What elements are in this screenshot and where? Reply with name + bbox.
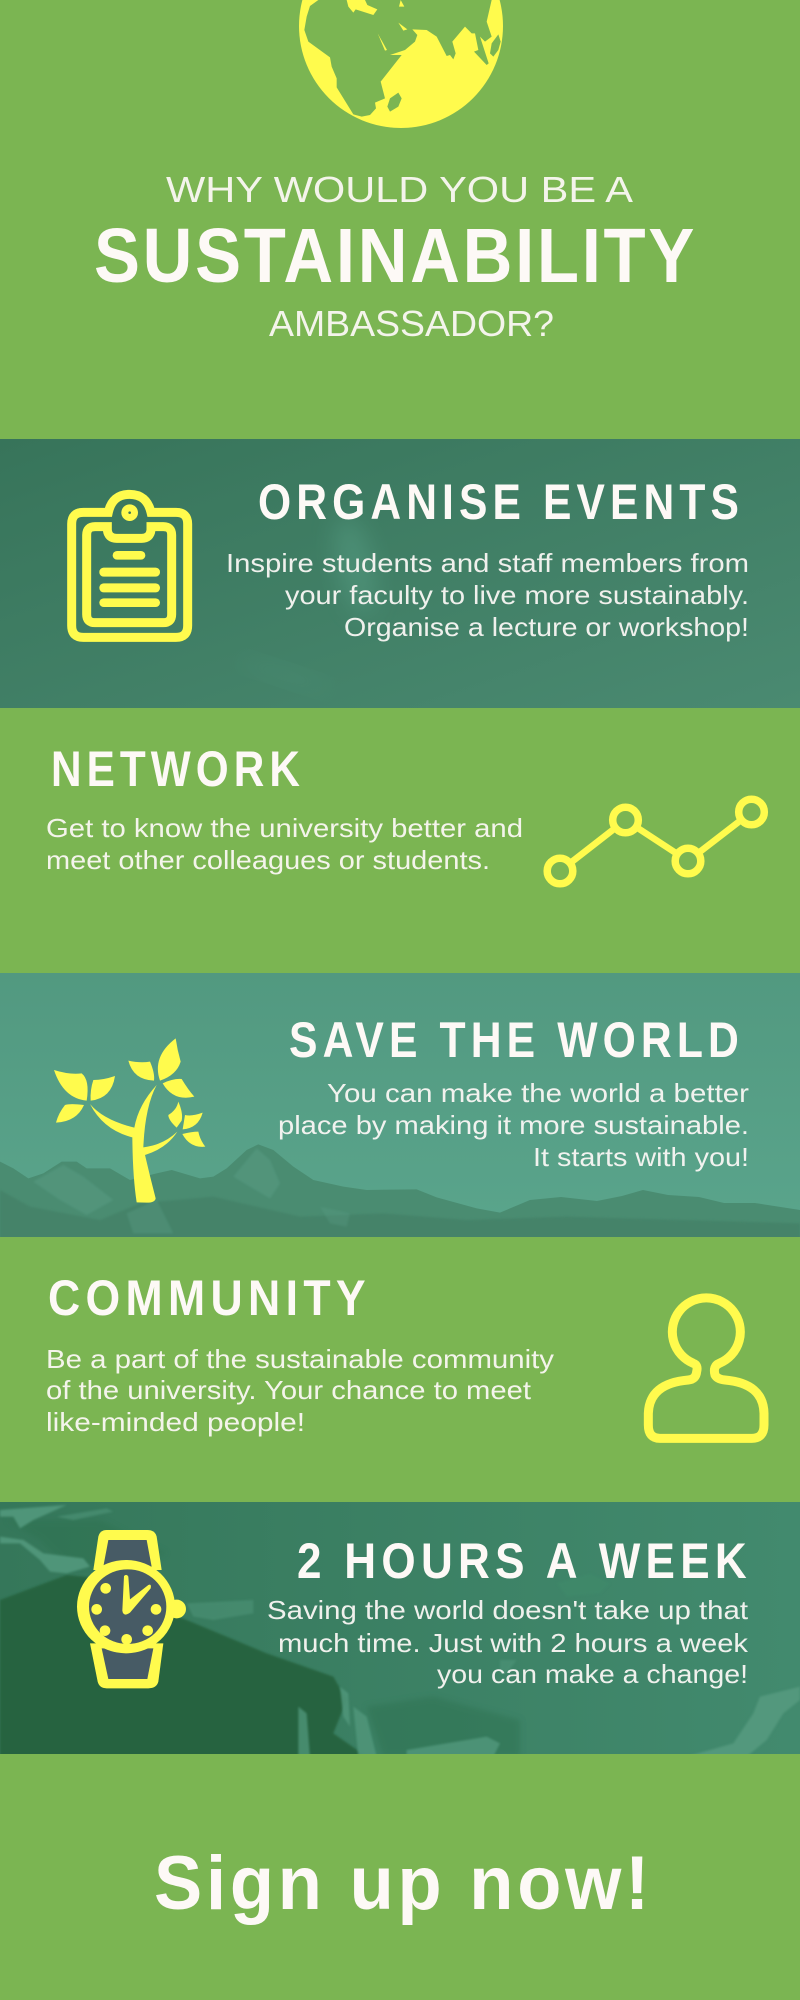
panel: 2 hours a week <box>0 1502 800 1757</box>
panel: organise events <box>0 439 800 708</box>
panel: community <box>46 1270 764 1438</box>
landscape <box>0 1505 800 1757</box>
text: organise events: Inspire students and staff members from <box>226 548 749 578</box>
call to action: Sign up now! <box>154 1841 653 1926</box>
heading: network: NETWORK <box>51 741 305 797</box>
mountains <box>0 1144 800 1243</box>
text: network <box>46 813 523 875</box>
text: network: meet other colleagues or students. <box>46 845 490 875</box>
panel: save the world <box>0 973 800 1243</box>
text: organise events <box>226 548 749 642</box>
text: network: Get to know the university better and <box>46 813 523 843</box>
text: save the world: place by making it more sustainable. <box>278 1110 749 1140</box>
heading: 2 hours a week: 2 HOURS A WEEK <box>297 1533 752 1589</box>
text: 2 hours a week: much time. Just with 2 hours a week <box>278 1628 749 1658</box>
icon: tree <box>54 1038 205 1203</box>
title line 2: SUSTAINABILITY <box>94 213 697 299</box>
text: community: like-minded people! <box>46 1407 305 1437</box>
icon: globe <box>299 0 503 128</box>
icon: person <box>648 1298 764 1438</box>
panel: network <box>46 741 764 884</box>
icon: watch <box>77 1530 186 1688</box>
text: save the world <box>278 1078 749 1172</box>
icon: network line <box>547 799 764 884</box>
text: organise events: Organise a lecture or workshop! <box>344 612 749 642</box>
text: community <box>46 1344 554 1437</box>
text: community: Be a part of the sustainable community <box>46 1344 554 1374</box>
title line 1: WHY WOULD YOU BE A <box>166 169 633 210</box>
text: community: of the university. Your chance to meet <box>46 1375 532 1405</box>
title <box>94 169 697 344</box>
text: organise events: your faculty to live more sustainably. <box>285 580 749 610</box>
icon: clipboard <box>72 494 188 637</box>
text: 2 hours a week: you can make a change! <box>437 1659 748 1689</box>
text: save the world: It starts with you! <box>533 1142 749 1172</box>
text: 2 hours a week: Saving the world doesn't take up that <box>267 1595 749 1625</box>
title line 3: AMBASSADOR? <box>269 303 554 344</box>
text: 2 hours a week <box>267 1595 749 1689</box>
heading: community: COMMUNITY <box>48 1270 371 1326</box>
text: save the world: You can make the world a better <box>327 1078 749 1108</box>
